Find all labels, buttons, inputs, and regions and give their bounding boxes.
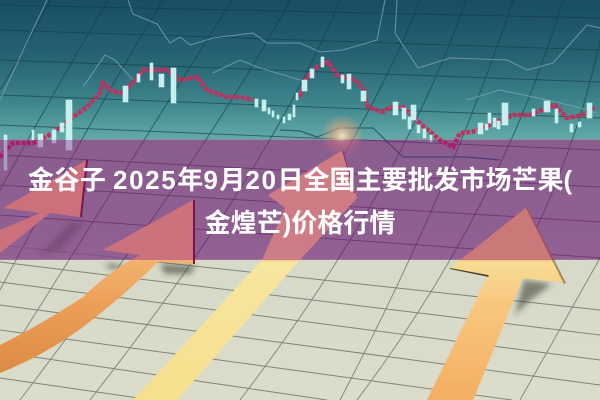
title text (28, 165, 572, 238)
arrow 1: far left (0, 160, 88, 253)
red candlesticks (0, 62, 595, 157)
arrow 2: orange (0, 200, 195, 373)
purple title band (0, 140, 600, 260)
white candlesticks (4, 57, 592, 170)
arrow 3: yellow centre (133, 150, 357, 400)
lower grid (0, 245, 600, 400)
chart trend lines (0, 0, 600, 113)
arrow 4: right (427, 207, 566, 400)
title text: 金煌芒)价格行情 (205, 208, 395, 238)
dark trend line (280, 128, 500, 160)
title text: 金谷子 2025年9月20日全国主要批发市场芒果( (28, 165, 572, 195)
arrow shadows (40, 222, 552, 315)
glow behind middle arrow (320, 114, 364, 158)
